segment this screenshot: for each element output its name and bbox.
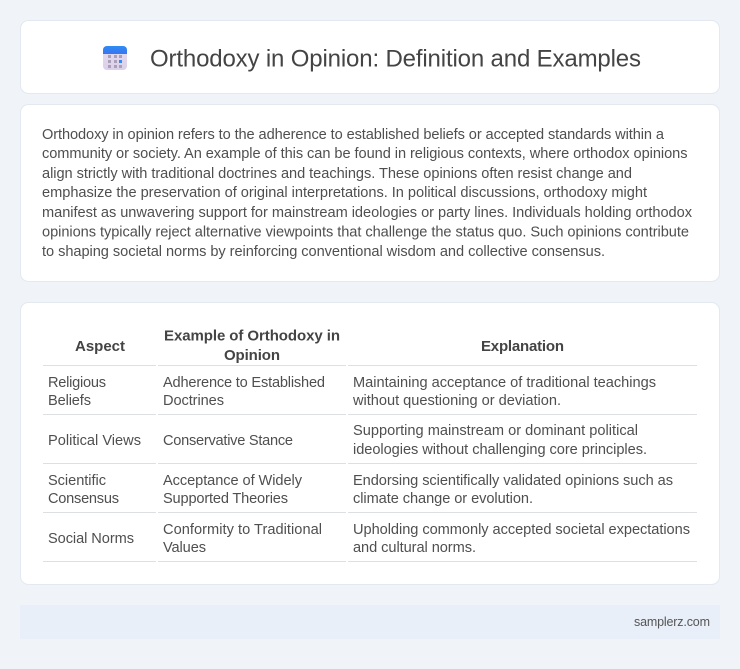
table row: religious beliefs: Maintaining acceptance of traditional teachings [353, 375, 656, 391]
text block: description paragraph: opinions typically reject alternative viewpoints that challenge the status quo. Such opinions contribute [42, 224, 689, 240]
text block: description paragraph: manifest as unwavering support for mainstream ideologies or party lines. Individuals holding orthodox [42, 205, 693, 221]
table row: political views [48, 423, 647, 458]
table rules [43, 365, 697, 562]
table row: social norms: Values [163, 540, 206, 556]
table row: social norms: Upholding commonly accepted societal expectations [353, 522, 690, 538]
table header row: Opinion [224, 347, 280, 364]
table row: social norms: and cultural norms. [353, 540, 476, 556]
text block: description paragraph: Orthodoxy in opinion refers to the adherence to established beliefs or accepted standards within a [42, 127, 665, 143]
table row: political views: ideologies without challenging core principles. [353, 442, 647, 458]
panel: title header [20, 20, 720, 94]
footer text: source: samplerz.com [634, 615, 710, 629]
text block: description paragraph: align strictly with traditional doctrines and teachings. These opinions often resist change and [42, 166, 632, 182]
table row: religious beliefs: Doctrines [163, 393, 224, 409]
table row: scientific consensus: climate change or evolution. [353, 491, 533, 507]
table row: religious beliefs [48, 375, 656, 409]
footer bar [20, 605, 720, 639]
table row: religious beliefs: without questioning or deviation. [352, 393, 561, 409]
table row: scientific consensus: Supported Theories [163, 491, 288, 507]
text block: description paragraph: to shaping societal norms by reinforcing conventional wisdom and collective consensus. [42, 244, 605, 260]
panel: comparison table [20, 302, 720, 584]
text block: description paragraph: community or society. An example of this can be found in religious contexts, where orthodox opinions [42, 146, 688, 162]
table row: social norms: Social Norms [48, 531, 134, 547]
title: Orthodoxy in Opinion: Definition and Examples [150, 46, 641, 72]
table row: religious beliefs: Religious [48, 375, 106, 391]
table row: scientific consensus: Consensus [48, 491, 119, 507]
table row: scientific consensus [48, 473, 673, 507]
table row: scientific consensus: Scientific [48, 473, 106, 489]
table header row [75, 328, 564, 364]
table header row: Example of Orthodoxy in [164, 328, 340, 344]
text block: description paragraph: emphasize the preservation of original interpretations. In political discussions, orthodoxy might [42, 185, 647, 201]
table header row: Explanation [481, 338, 564, 355]
table row: social norms [48, 522, 690, 556]
table row: political views: Conservative Stance [163, 433, 293, 449]
table header row: Aspect [75, 338, 125, 355]
table row: social norms: Conformity to Traditional [163, 522, 322, 538]
icon: calendar [103, 46, 127, 70]
table row: political views: Supporting mainstream or dominant political [353, 423, 638, 439]
table row: religious beliefs: Beliefs [48, 393, 91, 409]
table row: religious beliefs: Adherence to Established [163, 375, 325, 391]
panel: description [20, 104, 720, 282]
table row: scientific consensus: Acceptance of Widely [163, 473, 303, 489]
table row: political views: Political Views [48, 433, 141, 449]
table row: scientific consensus: Endorsing scientifically validated opinions such as [353, 473, 673, 489]
text block: description paragraph [42, 127, 693, 260]
